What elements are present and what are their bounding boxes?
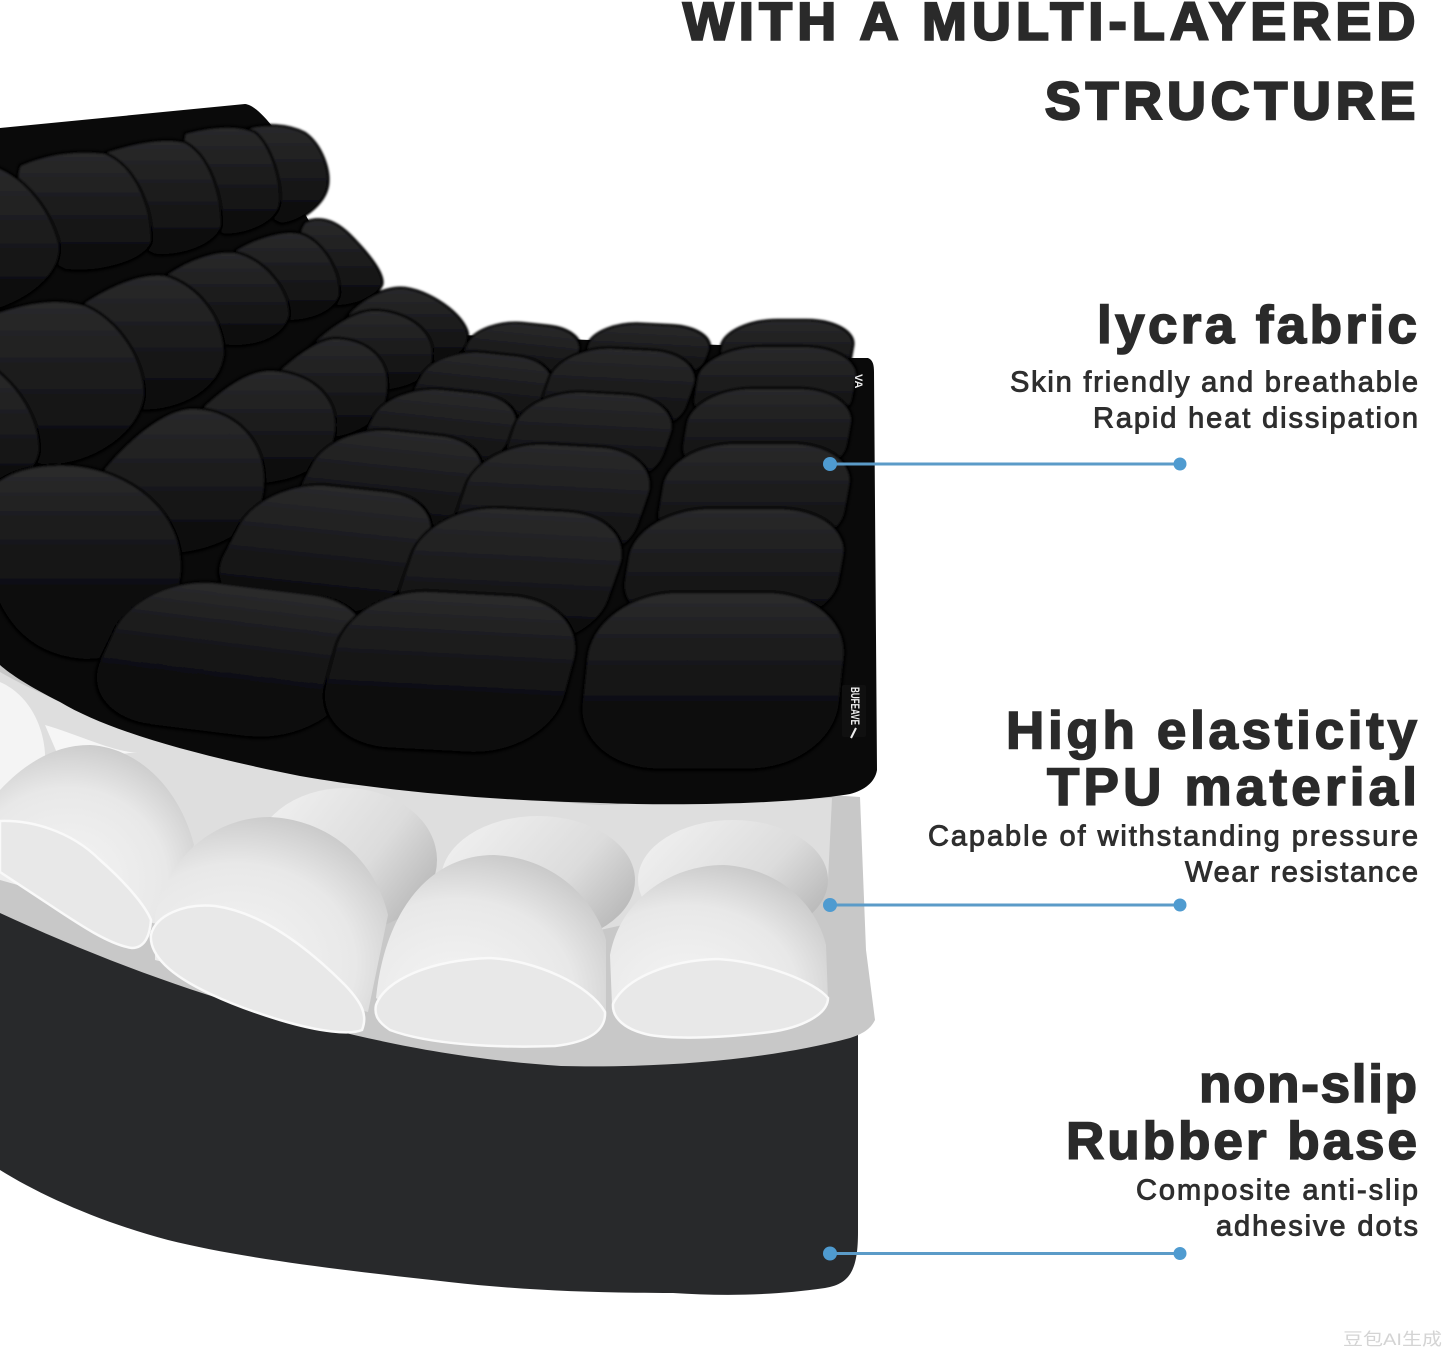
- cell cut faces: [0, 821, 828, 1047]
- title: STRUCTURE: [1045, 72, 1415, 131]
- heading: rubber base: [1066, 1055, 1417, 1171]
- back row B: [0, 219, 382, 495]
- back row of cells: [0, 682, 828, 944]
- description: rubber base: [1136, 1174, 1418, 1242]
- callout: rubber base: [823, 1055, 1418, 1260]
- description: TPU material: Capable of withstanding pressure: [928, 820, 1418, 852]
- heading: lycra fabric: lycra fabric: [1097, 296, 1417, 355]
- TPU layer: grey air-cell sheet: [0, 660, 875, 1066]
- description: TPU material: Wear resistance: [1185, 856, 1418, 888]
- cushion base plate: [0, 104, 877, 804]
- seat column 1: [0, 288, 468, 660]
- callout: TPU material: [823, 702, 1418, 912]
- heading: rubber base: non-slip: [1199, 1055, 1417, 1114]
- brand tag front: [842, 685, 866, 738]
- cushion air cells: [0, 125, 862, 770]
- watermark: 豆包AI生成: [1343, 1330, 1442, 1349]
- leader line: lycra fabric: [823, 457, 1186, 471]
- description: lycra fabric: Skin friendly and breathable: [1010, 366, 1418, 398]
- description: lycra fabric: [1010, 366, 1418, 434]
- callout: lycra fabric: [823, 296, 1418, 471]
- leader line: TPU material: [823, 898, 1186, 912]
- TPU layer: white air cells: [0, 672, 832, 1047]
- description: rubber base: adhesive dots: [1216, 1210, 1418, 1242]
- description: rubber base: Composite anti-slip: [1136, 1174, 1418, 1206]
- seat column 3: [309, 321, 717, 757]
- back row A: [0, 125, 328, 312]
- brand tag front: BUFEAVE: [848, 687, 862, 725]
- rubber base layer: [0, 880, 858, 1295]
- front row cell domes: [0, 745, 194, 925]
- heading: TPU material: High elasticity: [1006, 702, 1418, 760]
- heading: rubber base: Rubber base: [1066, 1112, 1417, 1171]
- lycra fabric cushion: [0, 104, 877, 804]
- heading: TPU material: TPU material: [1047, 758, 1417, 817]
- brand tag back: VA: [852, 374, 864, 389]
- description: TPU material: [928, 820, 1418, 888]
- upper filler between cells: [0, 672, 832, 930]
- title: [683, 0, 1415, 131]
- leader line: rubber base: [823, 1246, 1186, 1260]
- seat column 4: [575, 320, 862, 770]
- heading: TPU material: [1006, 702, 1418, 817]
- seat column 2: [74, 319, 591, 747]
- description: lycra fabric: Rapid heat dissipation: [1093, 402, 1418, 434]
